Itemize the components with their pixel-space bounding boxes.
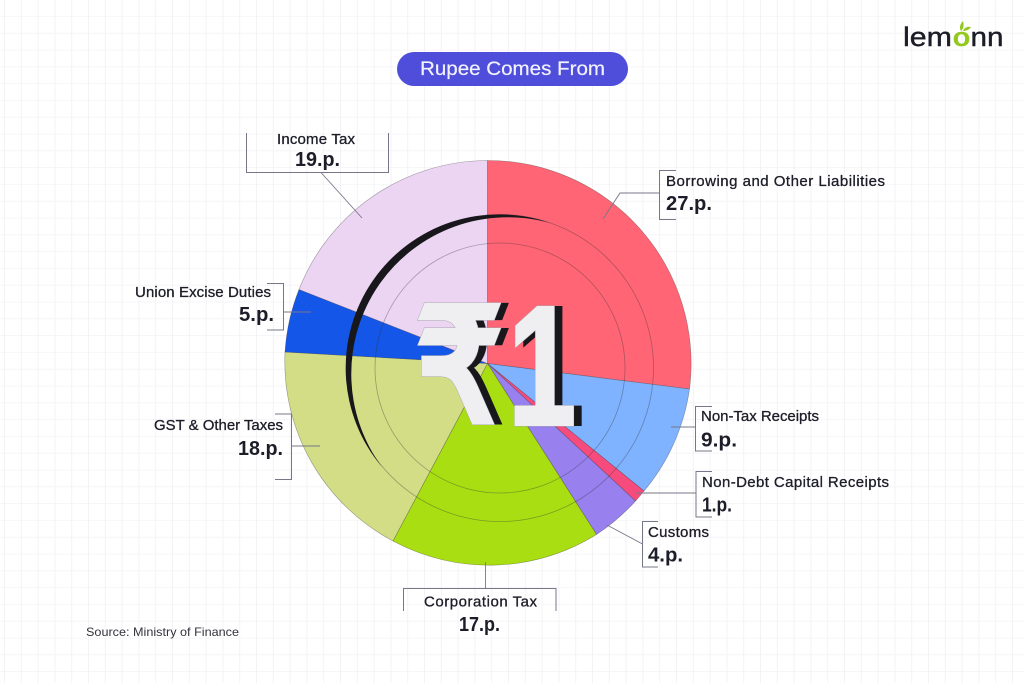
title pill: Rupee Comes From — [420, 59, 605, 80]
slice: borrowing — [488, 160, 691, 389]
one outline: 1 — [508, 272, 576, 462]
label: GST and other taxes: GST & Other Taxes — [154, 417, 283, 434]
label: non-tax receipts: 9.p. — [701, 430, 737, 452]
one face: 1 — [508, 272, 576, 462]
label: borrowing: 27.p. — [666, 193, 712, 215]
label: borrowing: Borrowing and Other Liabilities — [666, 173, 885, 190]
source note: Source: Ministry of Finance — [86, 625, 239, 639]
slice: customs — [488, 364, 636, 534]
label: non-debt capital receipts: Non-Debt Capital Receipts — [702, 474, 889, 491]
label: corporation tax: Corporation Tax — [424, 594, 538, 610]
label: non-tax receipts — [671, 406, 819, 452]
label: corporation tax: 17.p. — [459, 614, 500, 636]
slice: GST and other taxes — [285, 352, 488, 541]
label: union excise duties: Union Excise Duties — [135, 284, 271, 301]
label: borrowing — [603, 170, 885, 220]
label: non-debt capital receipts: 1.p. — [702, 494, 732, 516]
black crescent arc — [346, 214, 550, 467]
label: union excise duties — [135, 284, 311, 330]
rupee shadow: ₹ — [424, 280, 510, 454]
logo: lemonn: o — [952, 22, 970, 52]
rupee face: ₹ — [416, 280, 502, 454]
label: non-debt capital receipts — [636, 472, 889, 517]
slice: union excise duties — [285, 290, 488, 364]
logo: lemonn: lem — [903, 22, 952, 52]
slice: non-tax receipts — [488, 364, 690, 491]
label: union excise duties: 5.p. — [239, 304, 274, 326]
logo: lemonn: nn — [970, 22, 1004, 52]
rupee one symbol — [416, 272, 584, 462]
slice: income tax — [299, 160, 488, 364]
label: income tax: 19.p. — [295, 149, 340, 171]
slice: non-debt capital receipts — [488, 364, 644, 501]
label: GST and other taxes: 18.p. — [238, 438, 283, 460]
label: customs: 4.p. — [648, 544, 683, 566]
label: customs — [607, 522, 709, 567]
one shadow: 1 — [516, 272, 584, 462]
label: corporation tax — [404, 562, 556, 636]
label: customs: Customs — [648, 524, 709, 541]
label: income tax: Income Tax — [277, 131, 356, 148]
label: GST and other taxes — [154, 414, 320, 480]
label: income tax — [246, 131, 388, 218]
pie chart — [285, 160, 691, 565]
slice: corporation tax — [393, 364, 596, 565]
concentric rings — [346, 214, 654, 522]
label: non-tax receipts: Non-Tax Receipts — [701, 408, 819, 425]
rupee outline: ₹ — [416, 280, 502, 454]
logo: lemonn — [903, 21, 1004, 52]
title pill — [397, 52, 628, 86]
